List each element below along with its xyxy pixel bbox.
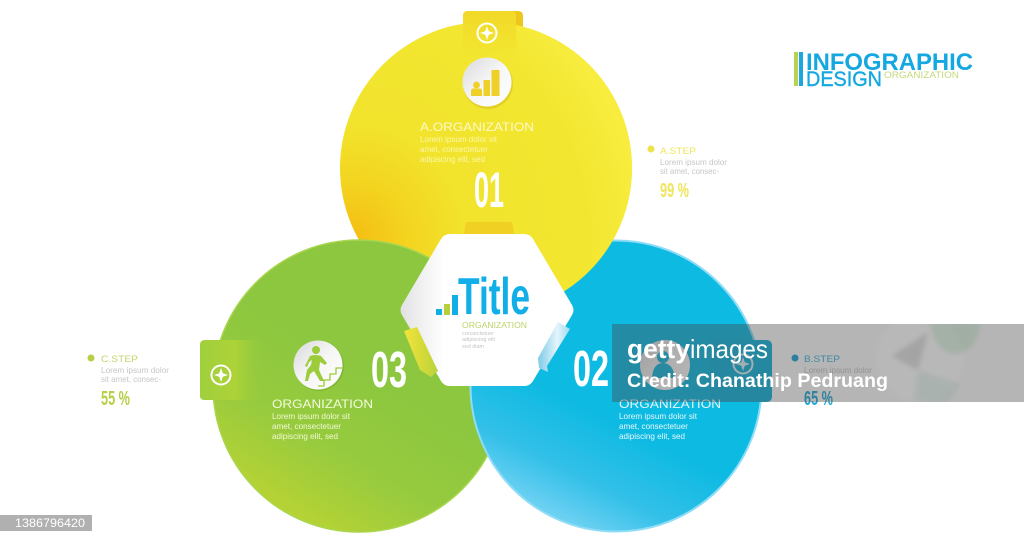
panel: green circle 03 — [213, 240, 505, 532]
badge background — [0, 515, 92, 531]
panel: blue circle 02 — [470, 240, 762, 532]
logo: Infographic Design — [794, 49, 973, 91]
badge number: 1386796420 — [15, 516, 85, 530]
stock id badge — [0, 515, 92, 531]
step value: 65 % — [804, 388, 833, 410]
step description: sit amet, consec- — [660, 167, 719, 176]
watermark ghost shapes — [896, 324, 980, 401]
logo subheading: ORGANIZATION: ORGANIZATION — [884, 70, 959, 81]
step description: Lorem ipsum dolor — [101, 366, 169, 375]
step value: 99 % — [660, 180, 689, 202]
subheading: ORGANIZATION: ORGANIZATION — [462, 321, 527, 330]
watermark text: gettyimages: images — [690, 334, 768, 364]
hexagon shape — [400, 234, 574, 386]
watermark text: gettyimages — [627, 334, 768, 364]
step value: 55 % — [101, 388, 130, 410]
text block: green description — [272, 411, 351, 441]
callout: A.STEP — [648, 146, 727, 202]
text block: hexagon description: sed diam — [462, 344, 484, 350]
bullet — [792, 354, 798, 362]
number: 02: 02 — [573, 340, 609, 397]
heading: ORGANIZATION: ORGANIZATION — [619, 397, 721, 411]
watermark band — [612, 324, 1024, 402]
logo heading: DESIGN: DESIGN — [806, 68, 882, 91]
text block: yellow description — [420, 134, 498, 164]
panel: yellow circle overlap on blue — [516, 25, 632, 292]
step label: B.STEP — [804, 354, 840, 365]
text block: hexagon description: adipiscing elit — [462, 337, 495, 343]
icon: people globe disc — [640, 340, 690, 390]
tab: yellow top ribbon back — [463, 11, 523, 30]
step description — [660, 158, 727, 176]
panel: central hexagon title — [400, 222, 574, 386]
bullet — [648, 146, 654, 152]
watermark text: credit: Credit: Chanathip Pedruang — [627, 371, 888, 392]
step description: sit amet, consec- — [101, 375, 161, 384]
tab: yellow hexagon clip — [404, 327, 438, 377]
icon: person climbing stairs disc — [294, 340, 344, 391]
heading: ORGANIZATION: ORGANIZATION — [272, 397, 373, 411]
watermark: getty images band — [612, 324, 1024, 402]
icon: plus target — [734, 354, 752, 374]
callout: C.STEP — [88, 354, 169, 410]
blue circle content — [573, 340, 772, 441]
logo heading: INFOGRAPHIC: INFOGRAPHIC — [806, 49, 973, 76]
step label: A.STEP — [660, 146, 696, 157]
icon: plus target — [478, 24, 496, 42]
tab: hexagon top clip — [463, 222, 515, 238]
bullet — [88, 354, 94, 362]
icon: rising bars — [436, 295, 458, 315]
logo bars — [794, 52, 803, 86]
icon: plus target — [212, 366, 230, 384]
tab: blue hexagon clip — [538, 322, 570, 372]
icon: bar chart with person disc — [462, 58, 513, 109]
title: Title: Title — [458, 268, 530, 326]
panel: yellow circle 01 — [340, 11, 632, 314]
text block: yellow description: Lorem ipsum dolor sit — [420, 134, 498, 144]
green circle content — [200, 340, 407, 441]
step description: Lorem ipsum dolor — [660, 158, 727, 167]
watermark text: gettyimages: getty — [627, 334, 690, 364]
number: 03: 03 — [371, 341, 407, 398]
step label: C.STEP — [101, 354, 138, 365]
text block: green description: amet, consectetuer — [272, 421, 341, 431]
tab: yellow ribbon front — [463, 11, 517, 60]
yellow circle content — [420, 11, 534, 218]
number: 01: 01 — [474, 162, 504, 218]
text block: hexagon description — [462, 331, 495, 350]
callout: B.STEP — [792, 354, 872, 410]
text block: green description: Lorem ipsum dolor sit — [272, 411, 351, 421]
text block: blue description: Lorem ipsum dolor sit — [619, 411, 698, 421]
text block: blue description: adipiscing elit, sed — [619, 431, 685, 441]
text block: blue description: amet, consectetuer — [619, 421, 688, 431]
step description — [101, 366, 169, 384]
text block: blue description — [619, 411, 698, 441]
heading: A.ORGANIZATION: A.ORGANIZATION — [420, 120, 534, 134]
text block: yellow description: amet, consectetuer — [420, 144, 488, 154]
step description: Lorem ipsum dolor — [804, 366, 872, 375]
text block: yellow description: adipiscing elit, sed — [420, 154, 485, 164]
tab: blue side ribbon — [710, 340, 772, 402]
text block: hexagon description: consectetuer — [462, 331, 494, 337]
text block: green description: adipiscing elit, sed — [272, 431, 338, 441]
tab: green side ribbon — [200, 340, 270, 400]
